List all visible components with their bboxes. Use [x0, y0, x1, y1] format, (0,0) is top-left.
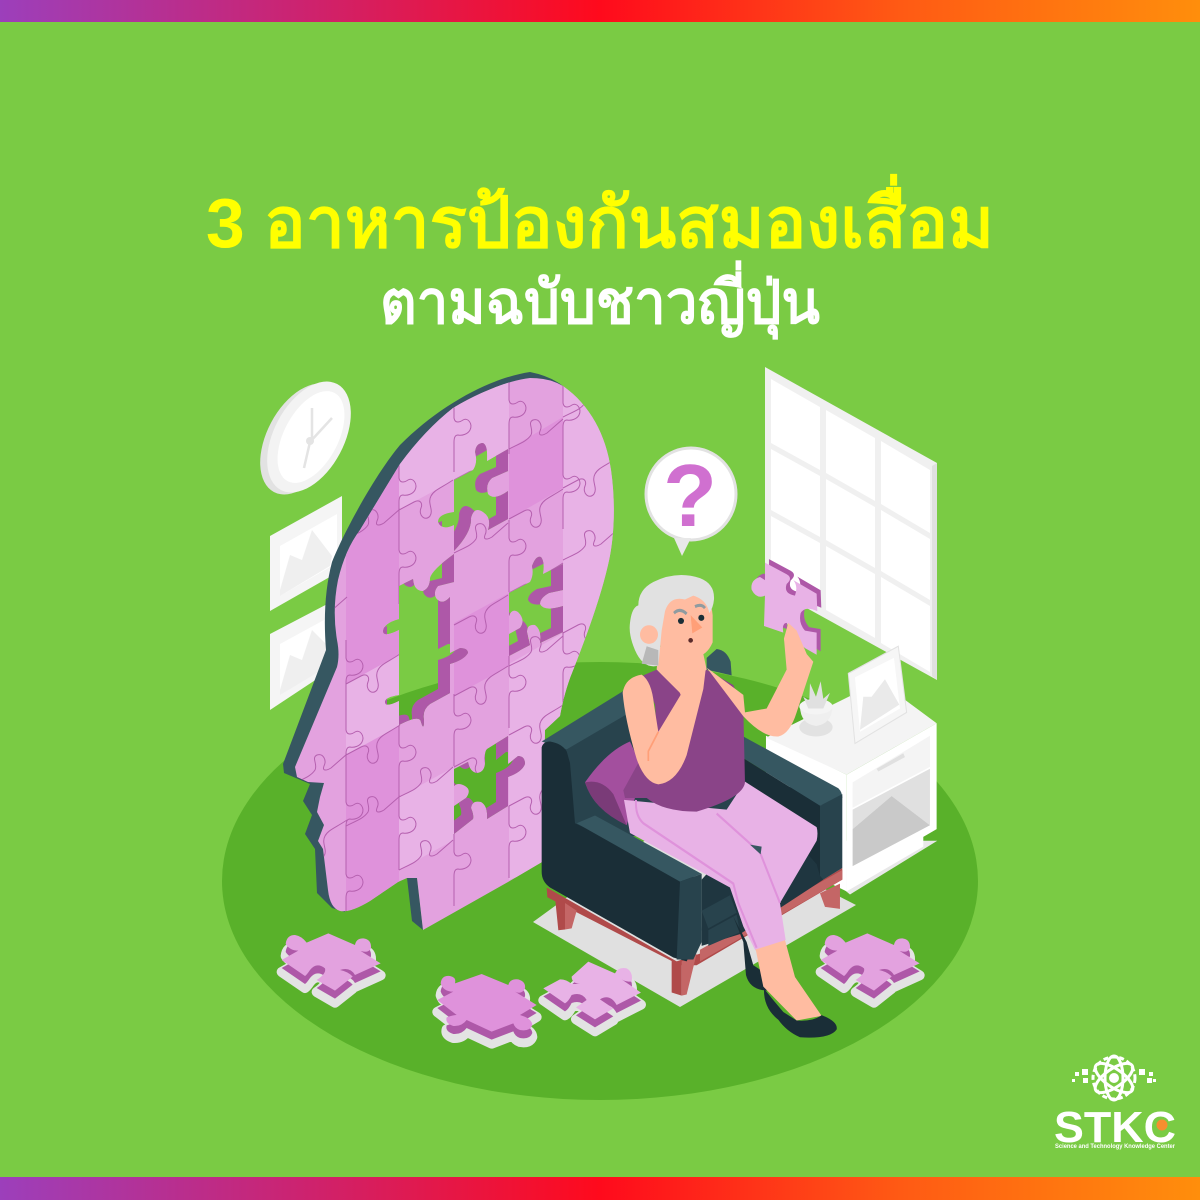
leg — [755, 940, 822, 1021]
question mark: ? — [663, 446, 717, 545]
hair — [630, 575, 714, 666]
trousers — [624, 782, 817, 950]
side table with plant and photo — [766, 646, 937, 894]
puzzle hole inner walls — [383, 443, 563, 834]
logo: STKC — [1054, 1056, 1176, 1152]
puzzle seams — [293, 382, 617, 928]
woman — [623, 575, 837, 1038]
icon: plant pot — [799, 681, 833, 736]
logo orange dot — [1156, 1120, 1168, 1130]
cushion — [585, 742, 643, 825]
logo pixel squares — [1072, 1069, 1156, 1083]
floor puzzle piece 3 — [543, 962, 641, 1031]
armchair — [542, 649, 842, 996]
picture frame lower — [270, 600, 335, 710]
icon: wall clock — [243, 368, 368, 508]
far shoe — [733, 917, 768, 991]
title line 2: ตามฉบับชาวญี่ปุ่น — [380, 260, 820, 340]
head side wall — [283, 372, 563, 930]
photo frame — [848, 646, 907, 743]
neck — [657, 646, 707, 695]
floor puzzle piece 2 — [437, 974, 537, 1044]
shirt — [623, 670, 745, 812]
icon: atom — [1091, 1056, 1137, 1100]
speech bubble — [646, 446, 736, 556]
top gradient bar — [0, 0, 1200, 22]
puzzle head — [280, 370, 620, 940]
picture frame upper — [270, 496, 342, 611]
floor puzzle piece 1 — [282, 933, 381, 1003]
floor ellipse — [222, 662, 978, 1100]
bottom gradient bar — [0, 1177, 1200, 1200]
handheld puzzle piece — [751, 559, 821, 662]
arms — [623, 646, 706, 784]
rug — [533, 815, 856, 1007]
face features — [674, 605, 705, 643]
floor puzzle piece 4 — [821, 933, 920, 1003]
head — [658, 594, 713, 659]
near shoe — [764, 989, 837, 1038]
fingers — [784, 623, 807, 662]
logo wordmark: STKC — [1054, 1103, 1176, 1152]
title line 1: 3 อาหารป้องกันสมองเสื่อม — [206, 173, 994, 262]
window — [765, 367, 937, 680]
logo tagline: Science and Technology Knowledge Center — [1055, 1144, 1176, 1150]
